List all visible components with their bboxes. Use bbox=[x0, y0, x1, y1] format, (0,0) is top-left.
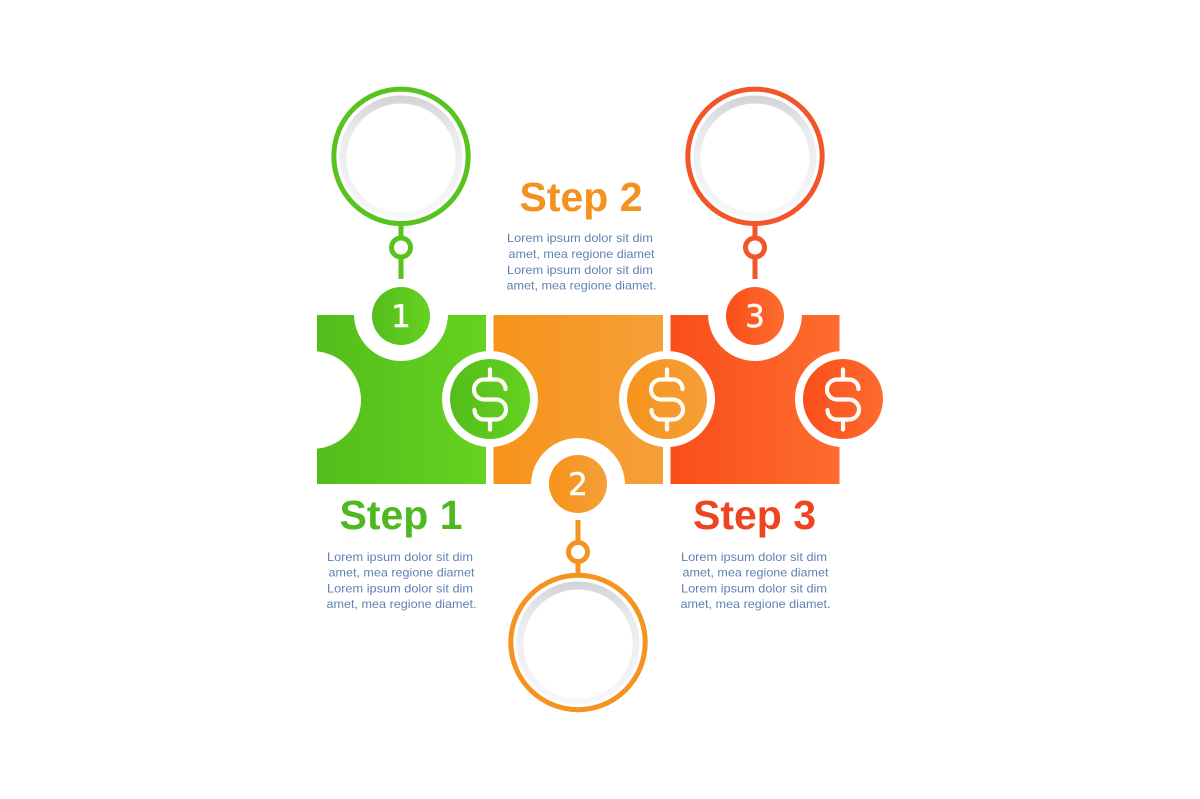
connector: green ring to badge 1 bbox=[392, 224, 410, 279]
icon: green dollar badge bbox=[442, 351, 538, 447]
text block: step 3 description: Lorem ipsum dolor sit dim bbox=[681, 550, 827, 564]
panel: step 1 green puzzle piece bbox=[263, 267, 486, 484]
image ring: red bbox=[688, 89, 822, 224]
number badge 3 bbox=[726, 287, 784, 345]
connector: red ring to badge 3 bbox=[746, 224, 764, 279]
text block: step 3 description bbox=[680, 550, 830, 611]
text block: step 1 description: amet, mea regione diamet. bbox=[326, 597, 476, 611]
icon: red dollar badge bbox=[795, 351, 891, 447]
text block: step 2 description: Lorem ipsum dolor sit dim bbox=[507, 231, 653, 245]
text block: step 2 description: amet, mea regione diamet. bbox=[506, 278, 656, 292]
text block: step 2 description: amet, mea regione diamet bbox=[508, 247, 655, 261]
text block: step 3 description: Lorem ipsum dolor sit dim bbox=[681, 582, 827, 596]
text block: step 2 description bbox=[506, 231, 656, 292]
text block: step 1 description: Lorem ipsum dolor sit dim bbox=[327, 550, 473, 564]
text block: step 3 description: amet, mea regione diamet. bbox=[680, 597, 830, 611]
heading: Step 3: Step 3 bbox=[693, 492, 816, 538]
text block: step 1 description: Lorem ipsum dolor sit dim bbox=[327, 582, 473, 596]
heading: Step 1: Step 1 bbox=[340, 492, 462, 538]
heading: Step 2: Step 2 bbox=[520, 174, 642, 220]
image ring: orange bbox=[511, 575, 645, 710]
number badge 3: 3 bbox=[745, 299, 765, 335]
panel: step 2 orange puzzle piece bbox=[494, 315, 663, 532]
connector: orange ring to badge 2 bbox=[568, 520, 588, 575]
number badge 1 bbox=[372, 287, 430, 345]
text block: step 1 description: amet, mea regione diamet bbox=[328, 566, 475, 580]
icon: orange dollar badge bbox=[619, 351, 715, 447]
number badge 1: 1 bbox=[391, 299, 411, 335]
number badge 2: 2 bbox=[568, 467, 588, 503]
text block: step 3 description: amet, mea regione diamet bbox=[682, 566, 829, 580]
text block: step 1 description bbox=[326, 550, 476, 611]
number badge 2 bbox=[549, 455, 607, 513]
text block: step 2 description: Lorem ipsum dolor sit dim bbox=[507, 263, 653, 277]
image ring: green bbox=[334, 89, 468, 224]
panel: step 3 red puzzle piece bbox=[670, 267, 840, 484]
